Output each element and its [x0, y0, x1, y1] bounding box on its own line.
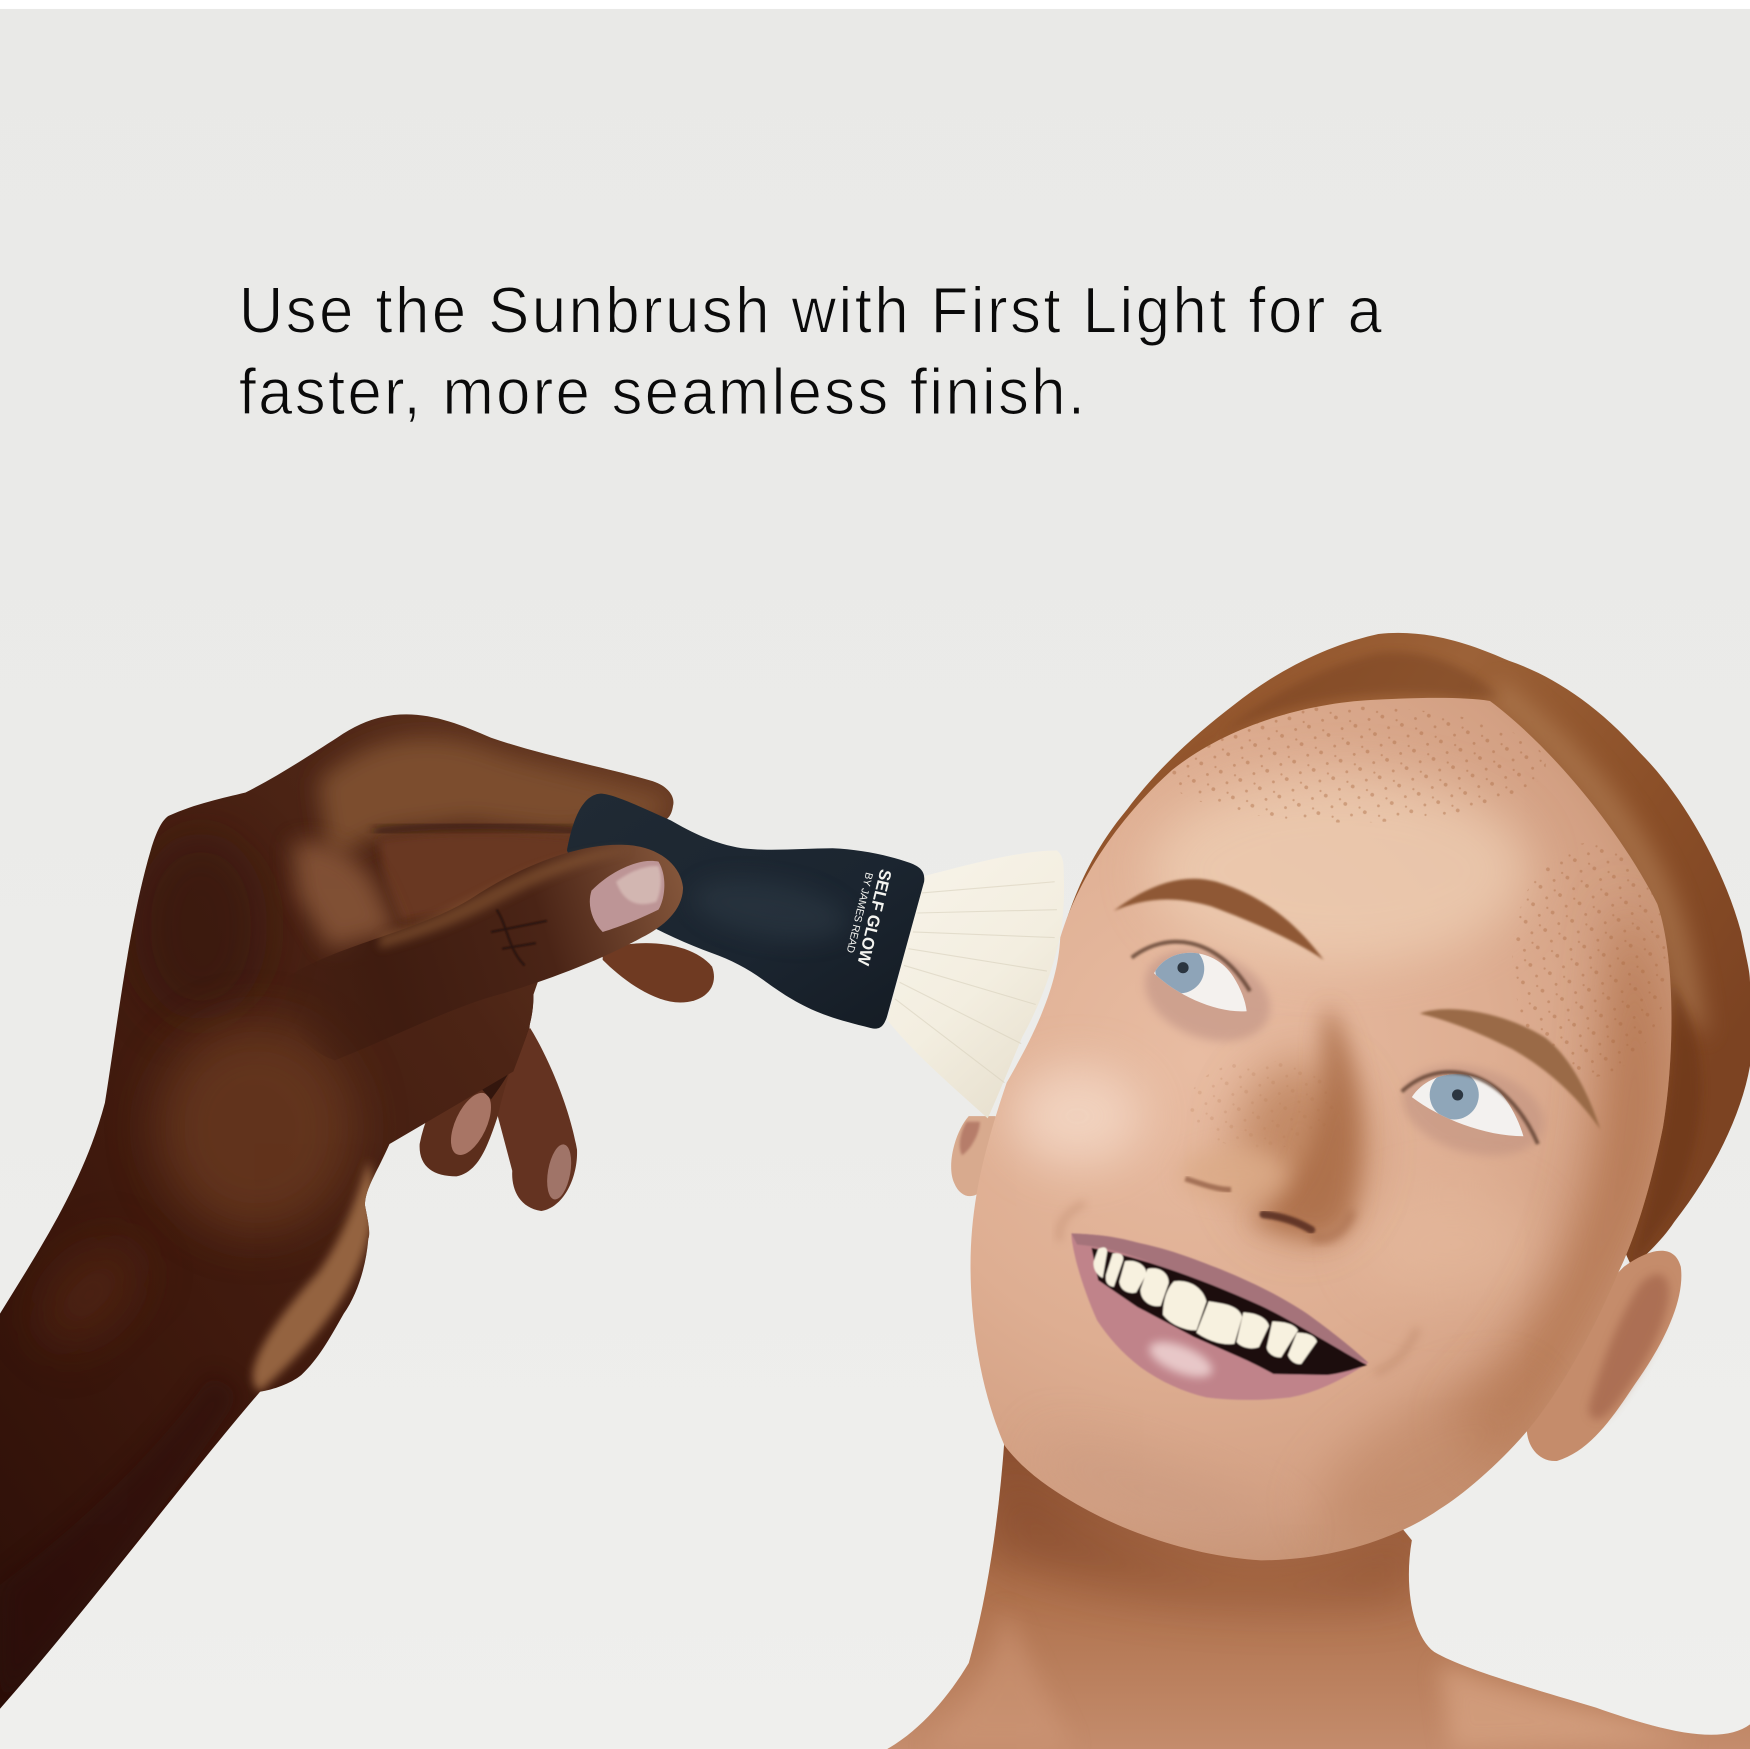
index finger highlight [318, 737, 670, 859]
brush [567, 794, 1064, 1118]
inner middle finger [379, 832, 580, 921]
ring fingernail [443, 1087, 499, 1161]
lower right jaw warm shadow [1320, 1388, 1525, 1534]
smile crease right [1375, 1328, 1417, 1373]
right eyebrow [1420, 1009, 1600, 1130]
dark mouth interior [1092, 1248, 1367, 1375]
forehead highlight [1150, 776, 1529, 965]
headline text [239, 275, 1383, 428]
little fingernail [543, 1143, 575, 1201]
left eyebrow [1114, 879, 1324, 960]
hair [1060, 633, 1750, 1267]
middle finger behind handle [603, 943, 714, 1002]
thumbnail highlight [616, 866, 661, 904]
palm heel [253, 1161, 374, 1392]
headline text: faster, more seamless finish. [239, 357, 1085, 428]
thumb web lighter area [292, 842, 396, 949]
little finger [498, 1028, 577, 1211]
upper lip darker band [1071, 1233, 1368, 1363]
thumb [279, 845, 683, 1060]
brush handle [567, 794, 924, 1029]
crease between fingers [374, 826, 580, 832]
hand fingers behind brush [420, 943, 714, 1211]
knuckle dark [126, 836, 254, 1000]
brush logo: BY JAMES READ [844, 871, 875, 954]
lips [1071, 1233, 1368, 1400]
left eye [1130, 938, 1272, 1043]
brush bristles [887, 851, 1064, 1118]
temple shadow [1451, 893, 1668, 1468]
cheek highlight right [1459, 1234, 1502, 1266]
lower lip gloss [1145, 1334, 1217, 1384]
headline text: Use the Sunbrush with First Light for a [239, 275, 1383, 347]
right eye [1399, 1065, 1543, 1156]
neck and shoulders [887, 1440, 1750, 1749]
left ear [951, 1116, 996, 1196]
handle sheen [688, 869, 852, 951]
cheek highlight left [1010, 1066, 1144, 1166]
ring finger [420, 993, 530, 1176]
brush logo: SELF GLOW [853, 867, 895, 968]
thumbnail [590, 861, 664, 932]
right ear [1527, 1251, 1681, 1461]
hand back midtone [156, 1021, 357, 1233]
thumb top edge highlight [379, 850, 631, 949]
wrist highlight [44, 1253, 131, 1340]
mouth [1071, 1233, 1368, 1400]
freckles [1155, 707, 1546, 823]
teeth [1094, 1247, 1317, 1364]
face [971, 698, 1671, 1573]
knuckle shadow above fingers [446, 988, 533, 1099]
arm shadow [8, 1395, 224, 1700]
knuckle creases [491, 910, 547, 965]
nose [1180, 1005, 1365, 1240]
chin shading [1023, 1418, 1298, 1573]
smile crease left [1059, 1203, 1085, 1241]
hand and arm [0, 714, 673, 1710]
